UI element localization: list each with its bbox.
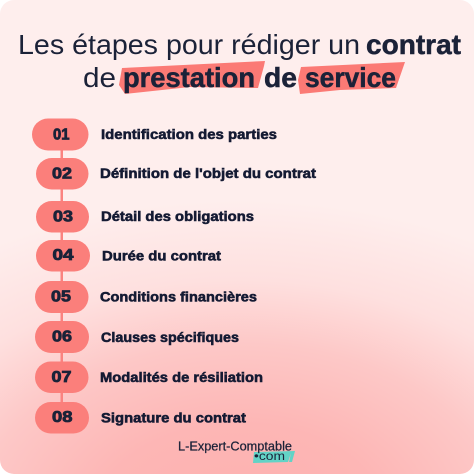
step 07: Modalités de résiliation [100,370,263,385]
step 05 [35,281,257,313]
step 03 [36,201,254,232]
step 02 [36,158,317,190]
step 04 [36,240,222,272]
step 04: 04 [52,247,74,264]
title highlight: service [298,62,405,94]
step 02: Définition de l'objet du contrat [100,166,317,181]
step 01: 01 [53,126,70,144]
step 05: 05 [51,289,71,306]
step 03: Détail des obligations [101,209,254,224]
title: contrat [366,29,461,60]
title line 1: Les étapes pour rédiger un [18,29,360,60]
step 01: Identification des parties [101,127,277,142]
step 08: Signature du contrat [101,410,247,426]
step 07: 07 [52,369,72,386]
step 06: 06 [52,329,72,346]
title [18,29,461,94]
step 08: 08 [52,409,73,426]
step 02: 02 [52,166,72,182]
logo highlight [253,451,295,463]
title: prestation [123,62,255,93]
logo: L-Expert-Comptable.com: •com [254,449,285,463]
step 08 [35,402,247,434]
timeline connector [60,145,63,410]
step 04: Durée du contrat [102,248,222,264]
title highlight: prestation [119,61,265,94]
logo: L-Expert-Comptable.com: L-Expert-Comptable [178,440,292,454]
step 06 [35,321,239,353]
step 06: Clauses spécifiques [101,330,239,345]
title line 2: de [83,62,116,93]
step 01 [32,118,277,150]
step 03: 03 [53,208,73,226]
logo: L-Expert-Comptable.com [178,440,295,463]
step 05: Conditions financières [100,290,257,304]
title: service [305,62,396,93]
title: de [264,62,297,93]
step 07 [35,362,263,393]
